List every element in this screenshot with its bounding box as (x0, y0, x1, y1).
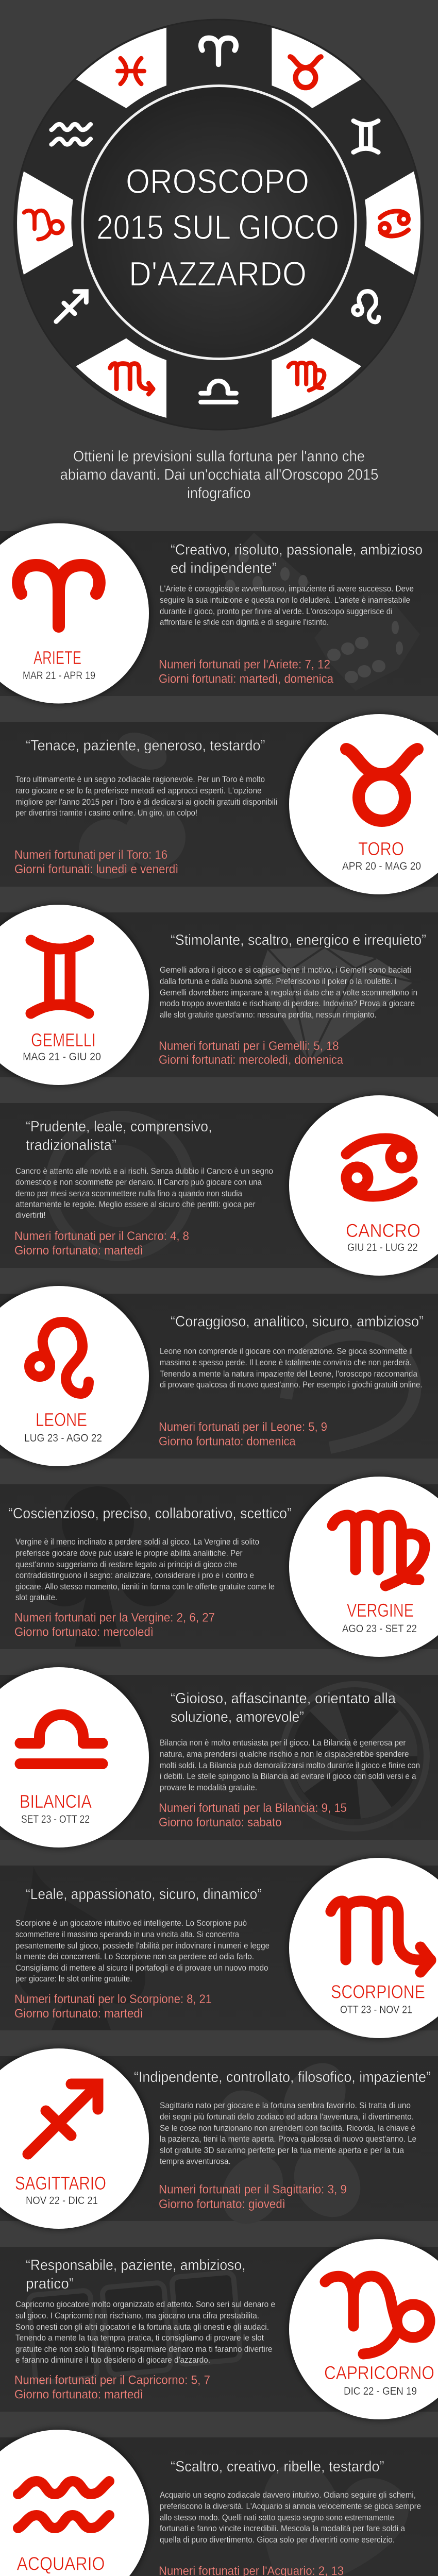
description: pesantemente sul gioco, possiede l'abilità per indovinare i numeri e legge (15, 1941, 269, 1951)
watermark: roulette wheel (282, 1684, 427, 1828)
icon: aries (18, 565, 99, 626)
quote (26, 1118, 212, 1154)
description (15, 1166, 273, 1220)
description: Sagittario nato per giocare e la fortuna sembra favorirlo. Si tratta di uno (160, 2100, 411, 2110)
icon: capricorn (325, 2276, 430, 2354)
lucky numbers (159, 2183, 347, 2211)
description: seguire la sua intuizione e questa non lo deluderà. L'ariete è inarrestabile (160, 595, 410, 605)
sign badge: Ariete (0, 523, 149, 704)
description: raro giocare e se lo fa preferisce metodi ed approcci esperti. L'opzione (15, 786, 262, 795)
description (160, 2490, 421, 2545)
lucky numbers (14, 1229, 189, 1258)
watermark: leaf and cherries (79, 725, 186, 879)
lucky numbers: Numeri fortunati per il Leone: 5, 9 (159, 1420, 327, 1434)
description: natura, ama prendersi qualche rischio e non le dispiacerebbe spendere (160, 1749, 409, 1759)
header: casino chip wheel (14, 20, 424, 430)
lucky numbers: Numeri fortunati per i Gemelli: 5, 18 (159, 1039, 339, 1053)
description (15, 2299, 275, 2365)
zodiac icons on chip (24, 38, 409, 402)
panel: Bilancia (0, 1667, 438, 1848)
description: scommettere il massimo sperando in una vincita alta. Si concentra (15, 1929, 239, 1939)
description: alle slot gratuite quest'anno: nessuna perdita, nessun rimpianto. (160, 1010, 377, 1020)
band (0, 2056, 438, 2221)
watermark: four-leaf clover (206, 2052, 374, 2235)
icon: sagittarius (28, 2084, 98, 2154)
description: attentamente le regole. Meglio essere al sicuro che pentiti: gioca per (15, 1199, 256, 1209)
description: contraddistinguono il segno: analizzare, considerare i pro e i contro e (15, 1570, 254, 1580)
panel: Vergine (0, 1477, 438, 1657)
quote (26, 2257, 245, 2292)
quote: “Responsabile, paziente, ambizioso, (26, 2257, 245, 2274)
description: fortunati e fanno vincite incredibili. Mescola la modalità per fare soldi a (160, 2523, 405, 2533)
description: Sono onesti con gli altri giocatori e la fortuna aiuta gli onesti e gli audaci. (15, 2322, 269, 2332)
name: SAGITTARIO (15, 2173, 106, 2194)
description: Gemelli dovrebbero imparare a regolarsi dato che a volte scommettono in (160, 988, 417, 997)
icon: cancer (346, 1139, 412, 1196)
intro text (60, 448, 378, 502)
description: provare le modalità gratuite. (160, 1783, 257, 1792)
description (15, 1918, 269, 1984)
band (0, 912, 438, 1077)
dates: NOV 22 - DIC 21 (26, 2195, 98, 2207)
band (0, 722, 438, 887)
description: preferisce giocare dove può usare le proprie abilità analitiche. Per (15, 1548, 243, 1558)
band (0, 2247, 438, 2412)
quote: soluzione, amorevole” (171, 1709, 304, 1725)
description: Tenendo a mente la natura impaziente del Leone, l'oroscopo raccomanda (160, 1369, 417, 1379)
lucky numbers: Numeri fortunati per l'Ariete: 7, 12 (159, 657, 330, 672)
sign badge: Sagittario (0, 2048, 149, 2229)
description: Bilancia non è molto entusiasta per il gioco. La Bilancia è generosa per (160, 1738, 406, 1748)
icon: taurus (346, 749, 417, 821)
panel: Scorpione (0, 1858, 438, 2038)
description: Capricorno giocatore molto organizzato ed attento. Sono seri sul denaro e (15, 2299, 275, 2309)
quote: “Scaltro, creativo, ribelle, testardo” (171, 2459, 384, 2475)
lucky numbers (14, 1611, 215, 1639)
lucky numbers (159, 1801, 347, 1829)
description (160, 1738, 420, 1792)
lucky numbers: Giorno fortunato: domenica (159, 1435, 296, 1449)
description (15, 1537, 275, 1602)
description: per divertirsi tramite i casino online. Un giro, un colpo! (15, 808, 197, 818)
panel: Toro (0, 714, 438, 894)
description (15, 774, 277, 818)
name: ARIETE (33, 647, 81, 668)
panel: Cancro (0, 1095, 438, 1276)
panel: Gemelli (0, 905, 438, 1085)
quote: “Leale, appassionato, sicuro, dinamico” (26, 1886, 262, 1903)
lucky numbers (159, 1039, 344, 1067)
description: tempra avventurosa. (160, 2157, 231, 2166)
sign badge: Toro (289, 714, 438, 894)
lucky numbers: Giorno fortunato: martedì (14, 2388, 143, 2402)
lucky numbers: Numeri fortunati per il Sagittario: 3, 9 (159, 2183, 347, 2197)
panel: Sagittario (0, 2048, 438, 2235)
watermark: horseshoe (286, 1334, 415, 1448)
sign badge: Gemelli (0, 905, 149, 1085)
description: la mente dei concorrenti. Lo Scorpione non sa perdere ed odia farlo. (15, 1952, 254, 1961)
lucky numbers: Numeri fortunati per il Toro: 16 (14, 848, 167, 862)
panel: Capricorno (0, 2239, 438, 2419)
panel: Acquario (0, 2430, 438, 2576)
description: gratuite che non solo ti faranno risparmiare denaro ma ti faranno divertire (15, 2344, 273, 2354)
lucky numbers: Giorno fortunato: giovedì (159, 2197, 285, 2211)
quote: “Coraggioso, analitico, sicuro, ambizioso” (171, 1314, 424, 1330)
description: Acquario un segno zodiacale davvero intuitivo. Odiano seguire gli schemi, (160, 2490, 416, 2500)
quote: “Creativo, risoluto, passionale, ambizioso (171, 542, 423, 558)
description: Vergine è il meno inclinato a perdere soldi al gioco. La Vergine di solito (15, 1537, 259, 1547)
description: Toro ultimamente è un segno zodiacale ragionevole. Per un Toro è molto (15, 774, 265, 784)
quote (171, 1690, 396, 1725)
lucky numbers: Giorno fortunato: martedì (14, 1244, 143, 1258)
dates: SET 23 - OTT 22 (21, 1814, 90, 1825)
sign badge: Capricorno (289, 2239, 438, 2419)
name: VERGINE (347, 1600, 414, 1621)
description: slot gratuite 3D saranno perfette per la tua mente aperta e per la tua (160, 2145, 404, 2155)
quote: ed indipendente” (171, 560, 277, 577)
title: D'AZZARDO (129, 255, 307, 294)
description: e faranno diminuire il tuo desiderio di giocare d'azzardo. (15, 2355, 210, 2365)
dates: AGO 23 - SET 22 (342, 1623, 417, 1635)
description: durante il gioco, pronto per finire al verde. L'oroscopo suggerisce di (160, 606, 393, 616)
description (160, 965, 417, 1020)
quote: “Prudente, leale, comprensivo, (26, 1118, 212, 1135)
band (0, 1675, 438, 1840)
description: Tenendo a mente la tua tempra pratica, ti consigliamo di provare le slot (15, 2333, 264, 2343)
icon: aquarius (18, 2481, 109, 2528)
band (0, 1484, 438, 1649)
description: allo stesso modo. Quelli nati sotto questo segno sono estremamente (160, 2513, 394, 2522)
dates: GIU 21 - LUG 22 (347, 1242, 418, 1253)
band (0, 1103, 438, 1268)
band (0, 1866, 438, 2030)
intro text: infografico (187, 485, 251, 502)
band (0, 1294, 438, 1459)
name: CANCRO (346, 1220, 420, 1241)
watermark: spade (16, 1867, 145, 2030)
lucky numbers: Numeri fortunati per lo Scorpione: 8, 21 (14, 1992, 212, 2006)
band (0, 531, 438, 696)
description: Cancro è attento alle novità e ai rischi. Senza dubbio il Cancro è un segno (15, 1166, 273, 1176)
description (160, 584, 414, 627)
sign badge: Vergine (289, 1477, 438, 1657)
description: demo per mesi senza scommettere nulla fino a quando non studia (15, 1189, 242, 1198)
intro text: Ottieni le previsioni sulla fortuna per l'anno che (73, 448, 365, 465)
band (0, 2437, 438, 2576)
description: per giocare: le slot online gratuite. (15, 1974, 132, 1984)
watermark: heart (262, 2462, 409, 2576)
description: Leone non comprende il giocare con moderazione. Se gioca scommette il (160, 1346, 413, 1356)
lucky numbers (14, 1992, 212, 2021)
description: migliore per l'anno 2015 per i Toro è di dedicarsi ai giochi gratuiti disponibili (15, 797, 277, 807)
description: slot gratuite. (15, 1592, 57, 1602)
description (160, 2100, 416, 2166)
watermark: slot machine 777 (28, 2272, 241, 2383)
title (96, 162, 339, 294)
title: 2015 SUL GIOCO (96, 208, 339, 247)
description: domestico e non scommette per denaro. Il Cancro può giocare con una (15, 1177, 262, 1187)
name: ACQUARIO (16, 2553, 105, 2574)
description: L'Ariete è coraggioso e avventuroso, impaziente di avere successo. Deve (160, 584, 414, 594)
lucky numbers: Numeri fortunati per la Vergine: 2, 6, 27 (14, 1611, 215, 1625)
watermark: diamond (258, 947, 413, 1062)
description: divertirti! (15, 1210, 45, 1220)
icon: gemini (31, 940, 89, 1013)
dates: DIC 22 - GEN 19 (344, 2385, 417, 2397)
quote: tradizionalista” (26, 1137, 116, 1154)
description: dalla fortuna e dalla buona sorte. Preferiscono il poker o la roulette. I (160, 976, 397, 986)
name: TORO (358, 838, 404, 859)
lucky numbers: Numeri fortunati per la Bilancia: 9, 15 (159, 1801, 347, 1815)
lucky numbers: Giorni fortunati: lunedì e venerdì (14, 862, 178, 876)
sign badge: Leone (0, 1286, 149, 1466)
sign badge: Scorpione (289, 1858, 438, 2038)
description: sul gioco. I Capricorno non rischiano, ma giocano una cifra prestabilita. (15, 2311, 259, 2320)
lucky numbers: Giorno fortunato: martedì (14, 2007, 143, 2021)
dates: MAG 21 - GIU 20 (23, 1051, 101, 1063)
description: Gemelli adora il gioco e si capisce bene il motivo, i Gemelli sono baciati (160, 965, 411, 975)
description (160, 1346, 423, 1389)
description: dei segni più fortunati dello zodiaco ed adora l'avventura, il divertimento. (160, 2112, 414, 2122)
quote: pratico” (26, 2276, 74, 2292)
lucky numbers (14, 2373, 210, 2402)
watermark: club (35, 1486, 179, 1647)
lucky numbers (159, 1420, 327, 1449)
quote: “Gioioso, affascinante, orientato alla (171, 1690, 396, 1707)
lucky numbers: Numeri fortunati per il Capricorno: 5, 7 (14, 2373, 210, 2387)
lucky numbers: Giorno fortunato: mercoledì (14, 1625, 154, 1639)
lucky numbers: Giorni fortunati: mercoledì, domenica (159, 1053, 344, 1067)
lucky numbers: Giorno fortunato: sabato (159, 1816, 281, 1829)
description: Consigliamo di mettere al sicuro il portafogli e di provare un nuovo modo (15, 1963, 268, 1973)
icon: libra (20, 1715, 103, 1764)
description: Se le cose non funzionano non arrenderti con facilità. Ricorda, la chiave è (160, 2123, 415, 2133)
watermark: dice (222, 533, 420, 691)
dates: APR 20 - MAG 20 (342, 860, 421, 872)
quote: “Coscienzioso, preciso, collaborativo, scettico” (8, 1505, 292, 1522)
sign badge: Cancro (289, 1095, 438, 1276)
panel: Leone (0, 1286, 438, 1466)
sign badge: Bilancia (0, 1667, 149, 1848)
dates: OTT 23 - NOV 21 (340, 2004, 412, 2016)
description: i debiti. Le stelle spingono la Bilancia ad evitare il gioco con soldi versi e a (160, 1771, 416, 1781)
description: quest'anno suggeriamo di restare legato ai principi di gioco che (15, 1560, 237, 1569)
title: OROSCOPO (126, 162, 309, 201)
name: BILANCIA (20, 1791, 92, 1812)
name: LEONE (36, 1409, 87, 1430)
intro text: abiamo davanti. Dai un'occhiata all'Oroscopo 2015 (60, 466, 378, 483)
icon: scorpio (331, 1901, 431, 1972)
panel: Ariete (0, 523, 438, 704)
description: Scorpione è un giocatore intuitivo ed intelligente. Lo Scorpione può (15, 1918, 247, 1928)
chip body (14, 20, 424, 430)
quote: “Tenace, paziente, generoso, testardo” (26, 738, 265, 754)
sign badge: Acquario (0, 2430, 149, 2576)
lucky numbers: Numeri fortunati per il Cancro: 4, 8 (14, 1229, 189, 1243)
lucky numbers (14, 848, 178, 876)
lucky numbers: Giorni fortunati: martedì, domenica (159, 672, 334, 686)
description: affrontare le sfide con dignità e di seguire l'istinto. (160, 617, 329, 627)
inner ring (82, 86, 356, 359)
description: giocare. Allo stesso momento, tieniti in forma con le offerte gratuite come le (15, 1582, 275, 1591)
description: quella di puro divertimento. Gioca solo per divertirti come esercizio. (160, 2535, 395, 2545)
icon: leo (29, 1322, 89, 1394)
name: GEMELLI (31, 1029, 96, 1050)
icon: virgo (332, 1515, 425, 1586)
watermark: casino chip (50, 1116, 190, 1256)
quote (171, 542, 423, 577)
dates: LUG 23 - AGO 22 (24, 1432, 102, 1444)
dates: MAR 21 - APR 19 (23, 670, 95, 682)
lucky numbers (159, 657, 334, 686)
white chip wedges (17, 28, 420, 418)
description: modo troppo avventato e rischiano di perdere. Indovina? Prova a giocare (160, 998, 415, 1008)
